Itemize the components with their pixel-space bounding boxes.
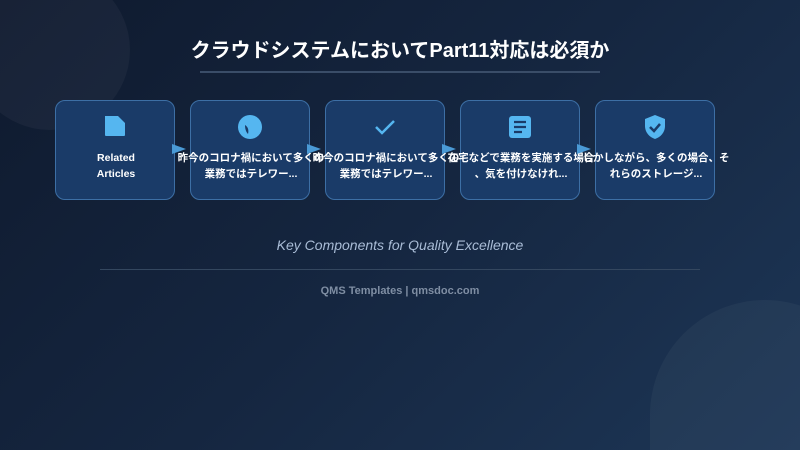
arrow 1: [172, 144, 186, 154]
card 4: 、気を付けなけれ...: [475, 168, 567, 180]
card 2: [190, 100, 310, 200]
card 2: 業務ではテレワー...: [205, 168, 297, 180]
icon: document: [105, 116, 125, 136]
footer: QMS Templates | qmsdoc.com: [321, 285, 479, 297]
card 4: 在宅などで業務を実施する場合: [448, 152, 594, 164]
icon: check: [375, 120, 395, 135]
arrow 2: [307, 144, 321, 154]
icon: shield: [645, 115, 665, 139]
card 1: related articles: [55, 100, 175, 200]
icon: globe: [238, 115, 262, 139]
card 4: [460, 100, 580, 200]
card 2: 昨今のコロナ禍において多くの: [178, 152, 324, 164]
subtitle: Key Components for Quality Excellence: [277, 237, 523, 253]
arrow 4: [577, 144, 591, 154]
card 3: [325, 100, 445, 200]
arrow 3: [442, 144, 456, 154]
card 3: 昨今のコロナ禍において多くの: [313, 152, 459, 164]
card 5: しかしながら、多くの場合、そ: [582, 152, 730, 164]
card 1: related articles: Related: [97, 152, 135, 164]
card 5: れらのストレージ...: [610, 168, 702, 180]
card 5: [595, 100, 715, 200]
card 1: related articles: Articles: [97, 168, 135, 180]
icon: note: [509, 116, 531, 138]
card 3: 業務ではテレワー...: [340, 168, 432, 180]
title: クラウドシステムにおいてPart11対応は必須か: [191, 40, 609, 62]
